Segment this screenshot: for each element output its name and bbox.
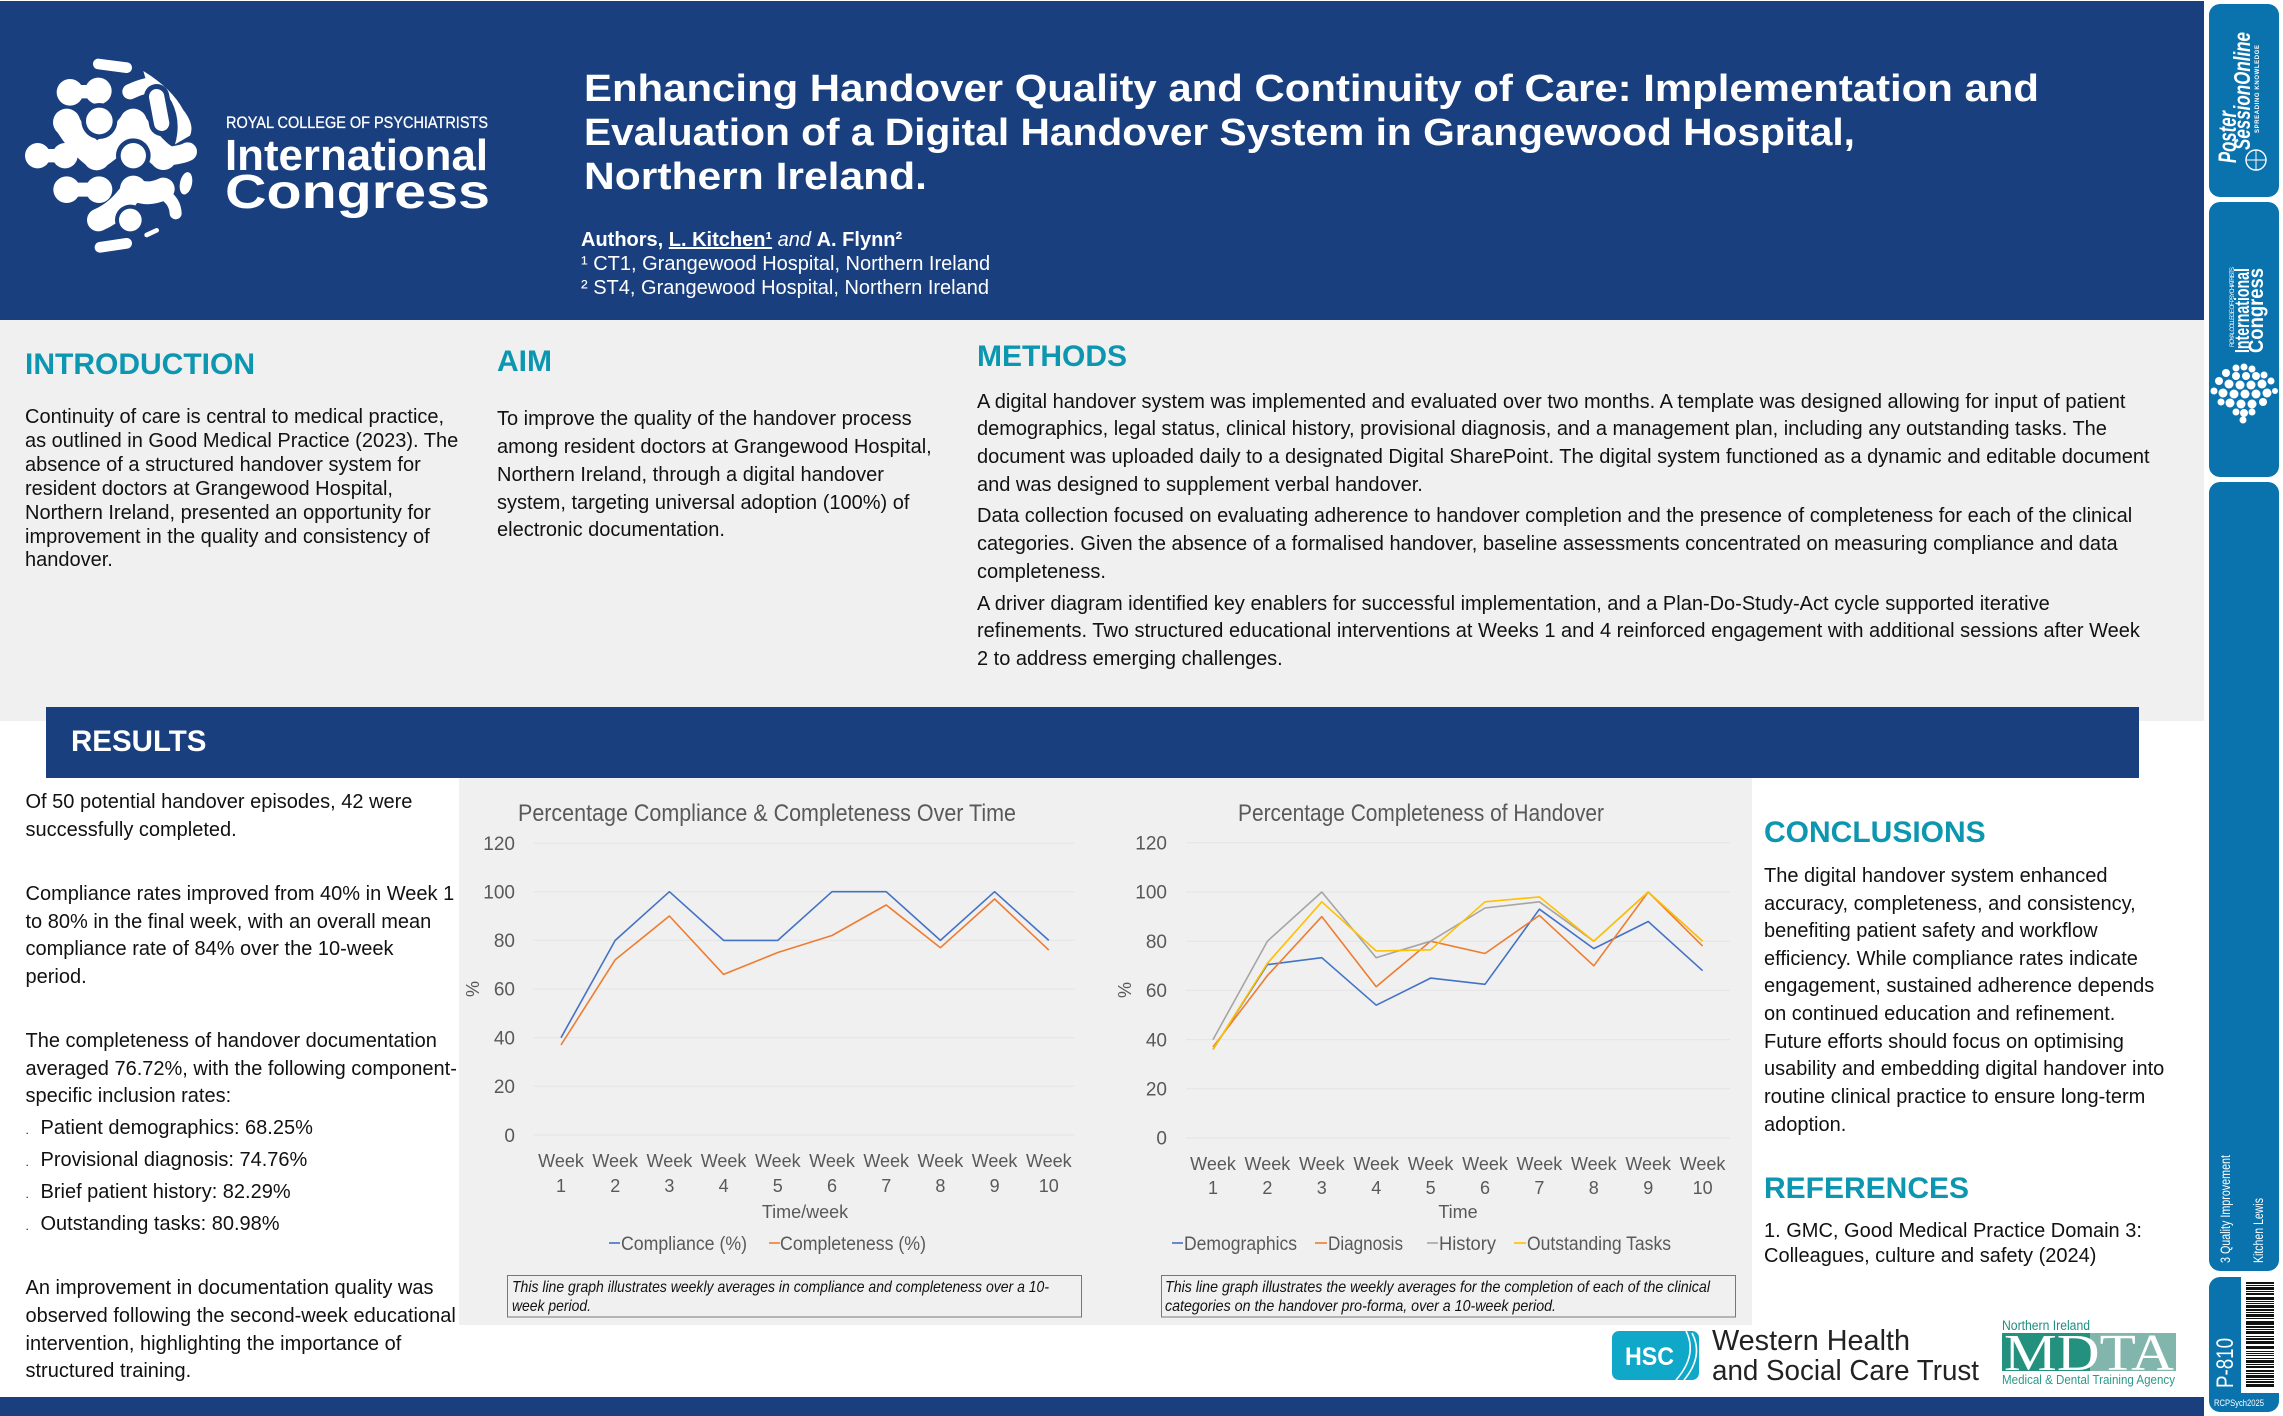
chart: percentage completeness of handover: 40 (1146, 1030, 1167, 1051)
panel: conclusions: routine clinical practice to ensure long-term (1764, 1086, 2145, 1108)
chart: percentage completeness of handover: 3 (1317, 1178, 1327, 1198)
logo text: Royal College of Psychiatrists International Congress (225, 113, 490, 219)
chart: percentage compliance and completeness over time: 40 (494, 1028, 515, 1050)
logo: HSC Western Health and Social Care Trust: and Social Care Trust (1712, 1355, 1979, 1387)
chart: percentage completeness of handover: Demographics (1184, 1234, 1297, 1255)
logo text: Royal College of Psychiatrists International Congress: ROYAL COLLEGE OF PSYCHIATRISTS (226, 113, 488, 132)
panel: references: REFERENCES (1764, 1172, 1969, 1205)
panel: results text: Outstanding tasks: 80.98% (40, 1213, 280, 1235)
caption: chart 1 note: This line graph illustrates weekly averages in compliance and completeness over a 10- (512, 1279, 1049, 1296)
panel: results text: Patient demographics: 68.25% (40, 1117, 313, 1139)
side tab: poster number and barcode (2209, 1277, 2279, 1412)
chart: percentage compliance and completeness over time: 60 (494, 980, 515, 1001)
chart: percentage compliance and completeness over time: Week (1026, 1151, 1073, 1171)
side tab: poster number and barcode: RCPSych2025 (2214, 1398, 2264, 1409)
panel: references: 1. GMC, Good Medical Practice Domain 3: (1764, 1220, 2142, 1242)
results heading bar (46, 707, 2139, 778)
chart: percentage completeness of handover: Outstanding Tasks (1527, 1234, 1671, 1255)
panel: methods: demographics, legal status, clinical history, provisional diagnosis, and a management plan, including any outstanding tasks. The (977, 418, 2107, 440)
caption: chart 2 note (1162, 1276, 1736, 1317)
chart: percentage completeness of handover: 10 (1693, 1178, 1713, 1198)
panel: methods: completeness. (977, 561, 1106, 583)
chart: percentage completeness of handover: Week (1408, 1154, 1454, 1174)
chart: percentage completeness of handover: Week (1571, 1154, 1618, 1174)
panel: conclusions: engagement, sustained adherence depends (1764, 975, 2154, 997)
chart: percentage compliance and completeness over time: 20 (494, 1077, 515, 1098)
chart: percentage compliance and completeness over time: 9 (990, 1176, 1000, 1196)
chart: percentage compliance and completeness over time: Compliance (%) (621, 1234, 747, 1255)
chart: percentage completeness of handover: Week (1517, 1154, 1563, 1174)
chart: percentage completeness of handover: Week (1625, 1154, 1672, 1174)
panel: introduction: resident doctors at Grangewood Hospital, (25, 478, 393, 500)
chart: percentage completeness of handover: Percentage Completeness of Handover (1238, 800, 1604, 827)
chart: percentage completeness of handover: 60 (1146, 981, 1167, 1002)
panel: conclusions: on continued education and refinement. (1764, 1003, 2115, 1025)
title: Evaluation of a Digital Handover System in Grangewood Hospital, (584, 112, 1855, 154)
panel: introduction: absence of a structured handover system for (25, 454, 421, 476)
chart: percentage compliance and completeness over time: 10 (1039, 1176, 1059, 1196)
caption: chart 1 note (508, 1276, 1082, 1317)
chart: percentage compliance and completeness over time: Percentage Compliance & Completeness Over Time (518, 800, 1016, 827)
panel: charts background (459, 778, 1752, 1325)
side tab: Poster Session Online: Poster (2214, 110, 2242, 163)
panel: results text: specific inclusion rates: (26, 1085, 231, 1107)
side tab: International Congress (2209, 202, 2279, 477)
caption: chart 2 note: categories on the handover pro-forma, over a 10-week period. (1165, 1298, 1556, 1315)
chart: percentage completeness of handover: Week (1190, 1154, 1237, 1174)
panel: conclusions: CONCLUSIONS (1764, 816, 1986, 849)
panel: results text: . (26, 1123, 29, 1137)
chart: percentage completeness of handover: Week (1299, 1154, 1346, 1174)
chart: percentage compliance and completeness over time: 0 (504, 1126, 515, 1147)
logo: HSC Western Health and Social Care Trust: HSC (1625, 1343, 1674, 1371)
panel: methods: document was uploaded daily to a designated Digital SharePoint. The digital system functioned as a dynamic and editable document (977, 446, 2150, 468)
chart: percentage compliance and completeness over time: Week (538, 1151, 585, 1171)
chart: percentage completeness of handover: 5 (1426, 1178, 1436, 1198)
panel: methods: METHODS (977, 340, 1127, 373)
chart: percentage completeness of handover: Time (1438, 1202, 1478, 1222)
logo: Northern Ireland Medical and Dental Training Agency: MDTA (2004, 1325, 2174, 1382)
panel: aim: AIM (497, 345, 552, 378)
chart: percentage completeness of handover: 6 (1480, 1178, 1490, 1198)
panel: methods: refinements. Two structured educational interventions at Weeks 1 and 4 reinforced engagement with additional sessions after Week (977, 620, 2141, 642)
panel: introduction: as outlined in Good Medical Practice (2023). The (25, 430, 458, 452)
panel: header band (0, 1, 2204, 320)
panel: conclusions: The digital handover system enhanced (1764, 865, 2108, 887)
chart: percentage completeness of handover: 4 (1371, 1178, 1381, 1198)
panel: introduction (25, 348, 458, 571)
caption: chart 1 note: week period. (512, 1298, 591, 1315)
panel: conclusions: adoption. (1764, 1114, 1846, 1136)
chart: percentage compliance and completeness over time: Week (647, 1151, 693, 1171)
title (584, 68, 2039, 198)
chart: percentage completeness of handover: % (1115, 982, 1135, 998)
chart: percentage completeness of handover: 120 (1135, 834, 1167, 854)
panel: conclusions: benefiting patient safety and workflow (1764, 920, 2098, 942)
panel: top grey section (0, 320, 2204, 721)
panel: introduction: Continuity of care is central to medical practice, (25, 406, 444, 428)
logo: HSC Western Health and Social Care Trust (1612, 1325, 1979, 1387)
chart: percentage compliance and completeness over time: Week (592, 1151, 639, 1171)
icon: congress logo globe (25, 64, 199, 247)
title: Northern Ireland. (584, 156, 927, 198)
chart: percentage compliance and completeness over time: Completeness (%) (780, 1234, 926, 1255)
panel: results text: intervention, highlighting the importance of (26, 1333, 402, 1355)
panel: aim: electronic documentation. (497, 519, 725, 541)
side tab: Poster Session Online (2209, 4, 2279, 197)
chart: percentage compliance and completeness over time: % (463, 981, 483, 997)
chart: percentage compliance and completeness over time: Week (809, 1151, 856, 1171)
logo: Northern Ireland Medical and Dental Training Agency: Northern Ireland (2002, 1318, 2090, 1333)
chart: percentage completeness of handover: 1 (1208, 1178, 1218, 1198)
panel: aim: Northern Ireland, through a digital handover (497, 464, 884, 486)
authors: Authors, L. Kitchen¹ and A. Flynn² (581, 229, 902, 251)
chart: percentage compliance and completeness over time: 5 (773, 1176, 783, 1196)
side tab: category and author: 3 Quality Improvement (2218, 1155, 2233, 1263)
chart: percentage completeness of handover: 8 (1589, 1178, 1599, 1198)
side tab: International Congress: ROYAL COLLEGE OF PSYCHIATRISTS (2230, 267, 2236, 347)
chart: percentage completeness of handover (1115, 800, 1730, 1255)
panel: aim: among resident doctors at Grangewood Hospital, (497, 436, 932, 458)
panel: results text: successfully completed. (26, 819, 237, 841)
panel: results text: observed following the second-week educational (26, 1305, 456, 1327)
panel: conclusions: Future efforts should focus on optimising (1764, 1031, 2124, 1053)
panel: conclusions: accuracy, completeness, and consistency, (1764, 893, 2136, 915)
chart: percentage compliance and completeness over time: 3 (664, 1176, 674, 1196)
chart: percentage compliance and completeness over time: Week (972, 1151, 1018, 1171)
panel: results text: . (26, 1219, 29, 1233)
chart: percentage completeness of handover: History (1439, 1234, 1496, 1255)
footer band (0, 1397, 2204, 1416)
chart: percentage compliance and completeness over time: 2 (610, 1176, 620, 1196)
panel: results text (26, 791, 457, 1382)
chart: percentage completeness of handover: Diagnosis (1328, 1234, 1403, 1255)
chart: percentage compliance and completeness over time: Week (755, 1151, 802, 1171)
panel: results text: Of 50 potential handover episodes, 42 were (26, 791, 412, 813)
panel: results text: . (26, 1187, 29, 1201)
logo text: Royal College of Psychiatrists International Congress: International (225, 131, 488, 180)
authors: ¹ CT1, Grangewood Hospital, Northern Ireland (581, 253, 990, 275)
chart: percentage compliance and completeness over time: 6 (827, 1176, 837, 1196)
panel: aim (497, 345, 932, 541)
side tab: International Congress: International (2232, 268, 2254, 353)
panel: methods: 2 to address emerging challenges. (977, 648, 1283, 670)
title: Enhancing Handover Quality and Continuity of Care: Implementation and (584, 68, 2039, 110)
chart: percentage completeness of handover: 80 (1146, 932, 1167, 953)
panel: results text: Brief patient history: 82.29% (40, 1181, 291, 1203)
panel: references (1764, 1172, 2142, 1267)
chart: percentage completeness of handover: 20 (1146, 1080, 1167, 1100)
side tab: poster number and barcode: P-810 (2212, 1338, 2239, 1388)
panel: methods: A digital handover system was implemented and evaluated over two months. A template was designed allowing for input of patient (977, 391, 2126, 413)
chart: percentage completeness of handover: Week (1245, 1154, 1291, 1174)
results heading bar: RESULTS (71, 725, 206, 758)
chart: percentage compliance and completeness over time: 4 (719, 1176, 729, 1196)
panel: results text: The completeness of handover documentation (26, 1030, 437, 1052)
panel: results text: to 80% in the final week, with an overall mean (26, 911, 431, 933)
panel: introduction: improvement in the quality and consistency of (25, 526, 430, 548)
panel: methods: categories. Given the absence of a formalised handover, baseline assessments concentrated on measuring compliance and data (977, 533, 2119, 555)
authors (581, 229, 990, 299)
side tab: International Congress: Congress (2245, 268, 2268, 353)
chart: percentage compliance and completeness over time: Week (701, 1151, 747, 1171)
chart: percentage compliance and completeness over time (463, 800, 1075, 1255)
panel: results text: Compliance rates improved from 40% in Week 1 (26, 883, 454, 905)
panel: results text: . (26, 1155, 29, 1169)
panel: conclusions (1764, 816, 2164, 1136)
chart: percentage compliance and completeness over time: Time/week (762, 1202, 849, 1222)
chart: percentage completeness of handover: 7 (1534, 1178, 1544, 1198)
panel: references: Colleagues, culture and safety (2024) (1764, 1245, 2096, 1267)
panel: results text: Provisional diagnosis: 74.76% (40, 1149, 308, 1171)
chart: percentage compliance and completeness over time: Week (863, 1151, 910, 1171)
panel: results text: period. (26, 966, 87, 988)
panel: methods: A driver diagram identified key enablers for successful implementation, and a Plan-Do-Study-Act cycle supported iterative (977, 593, 2050, 615)
panel: results text: averaged 76.72%, with the following component- (26, 1058, 457, 1080)
chart: percentage compliance and completeness over time: 100 (483, 882, 515, 904)
authors: ² ST4, Grangewood Hospital, Northern Ireland (581, 277, 989, 299)
panel: introduction: Northern Ireland, presented an opportunity for (25, 502, 431, 524)
panel: results text: compliance rate of 84% over the 10-week (26, 938, 394, 960)
logo text: Royal College of Psychiatrists International Congress: Congress (225, 166, 490, 219)
side tab: category and author (2209, 482, 2279, 1271)
panel: aim: system, targeting universal adoption (100%) of (497, 492, 910, 514)
chart: percentage completeness of handover: 0 (1156, 1129, 1167, 1150)
chart: percentage completeness of handover: Week (1462, 1154, 1509, 1174)
panel: conclusions: usability and embedding digital handover into (1764, 1058, 2164, 1080)
panel: results text: structured training. (26, 1360, 191, 1382)
panel: conclusions: efficiency. While compliance rates indicate (1764, 948, 2138, 970)
logo: Northern Ireland Medical and Dental Training Agency: Medical & Dental Training Agency (2002, 1373, 2176, 1387)
panel: methods (977, 340, 2150, 670)
panel: introduction: INTRODUCTION (25, 348, 255, 381)
panel: methods: and was designed to supplement verbal handover. (977, 474, 1423, 496)
panel: methods: Data collection focused on evaluating adherence to handover completion and the presence of completeness for each of the clinical (977, 505, 2132, 527)
chart: percentage completeness of handover: Week (1353, 1154, 1400, 1174)
chart: percentage compliance and completeness over time: 80 (494, 931, 515, 952)
side tab: Poster Session Online: SPREADING KNOWLEDGE (2255, 45, 2261, 133)
chart: percentage compliance and completeness over time: 1 (556, 1176, 566, 1196)
panel: aim: To improve the quality of the handover process (497, 408, 912, 430)
chart: percentage compliance and completeness over time: Week (918, 1151, 964, 1171)
panel: introduction: handover. (25, 549, 113, 571)
chart: percentage completeness of handover: 2 (1262, 1178, 1272, 1198)
caption: chart 2 note: This line graph illustrates the weekly averages for the completion of each of the clinical (1165, 1279, 1710, 1296)
chart: percentage completeness of handover: Week (1680, 1154, 1726, 1174)
panel: results text: An improvement in documentation quality was (26, 1277, 434, 1299)
chart: percentage completeness of handover: 9 (1643, 1178, 1653, 1198)
logo: HSC Western Health and Social Care Trust: Western Health (1712, 1325, 1910, 1357)
chart: percentage compliance and completeness over time: 120 (483, 834, 515, 855)
side tab: category and author: Kitchen Lewis (2251, 1198, 2266, 1263)
chart: percentage compliance and completeness over time: 8 (935, 1176, 945, 1196)
chart: percentage completeness of handover: 100 (1135, 883, 1167, 904)
chart: percentage compliance and completeness over time: 7 (881, 1176, 891, 1196)
